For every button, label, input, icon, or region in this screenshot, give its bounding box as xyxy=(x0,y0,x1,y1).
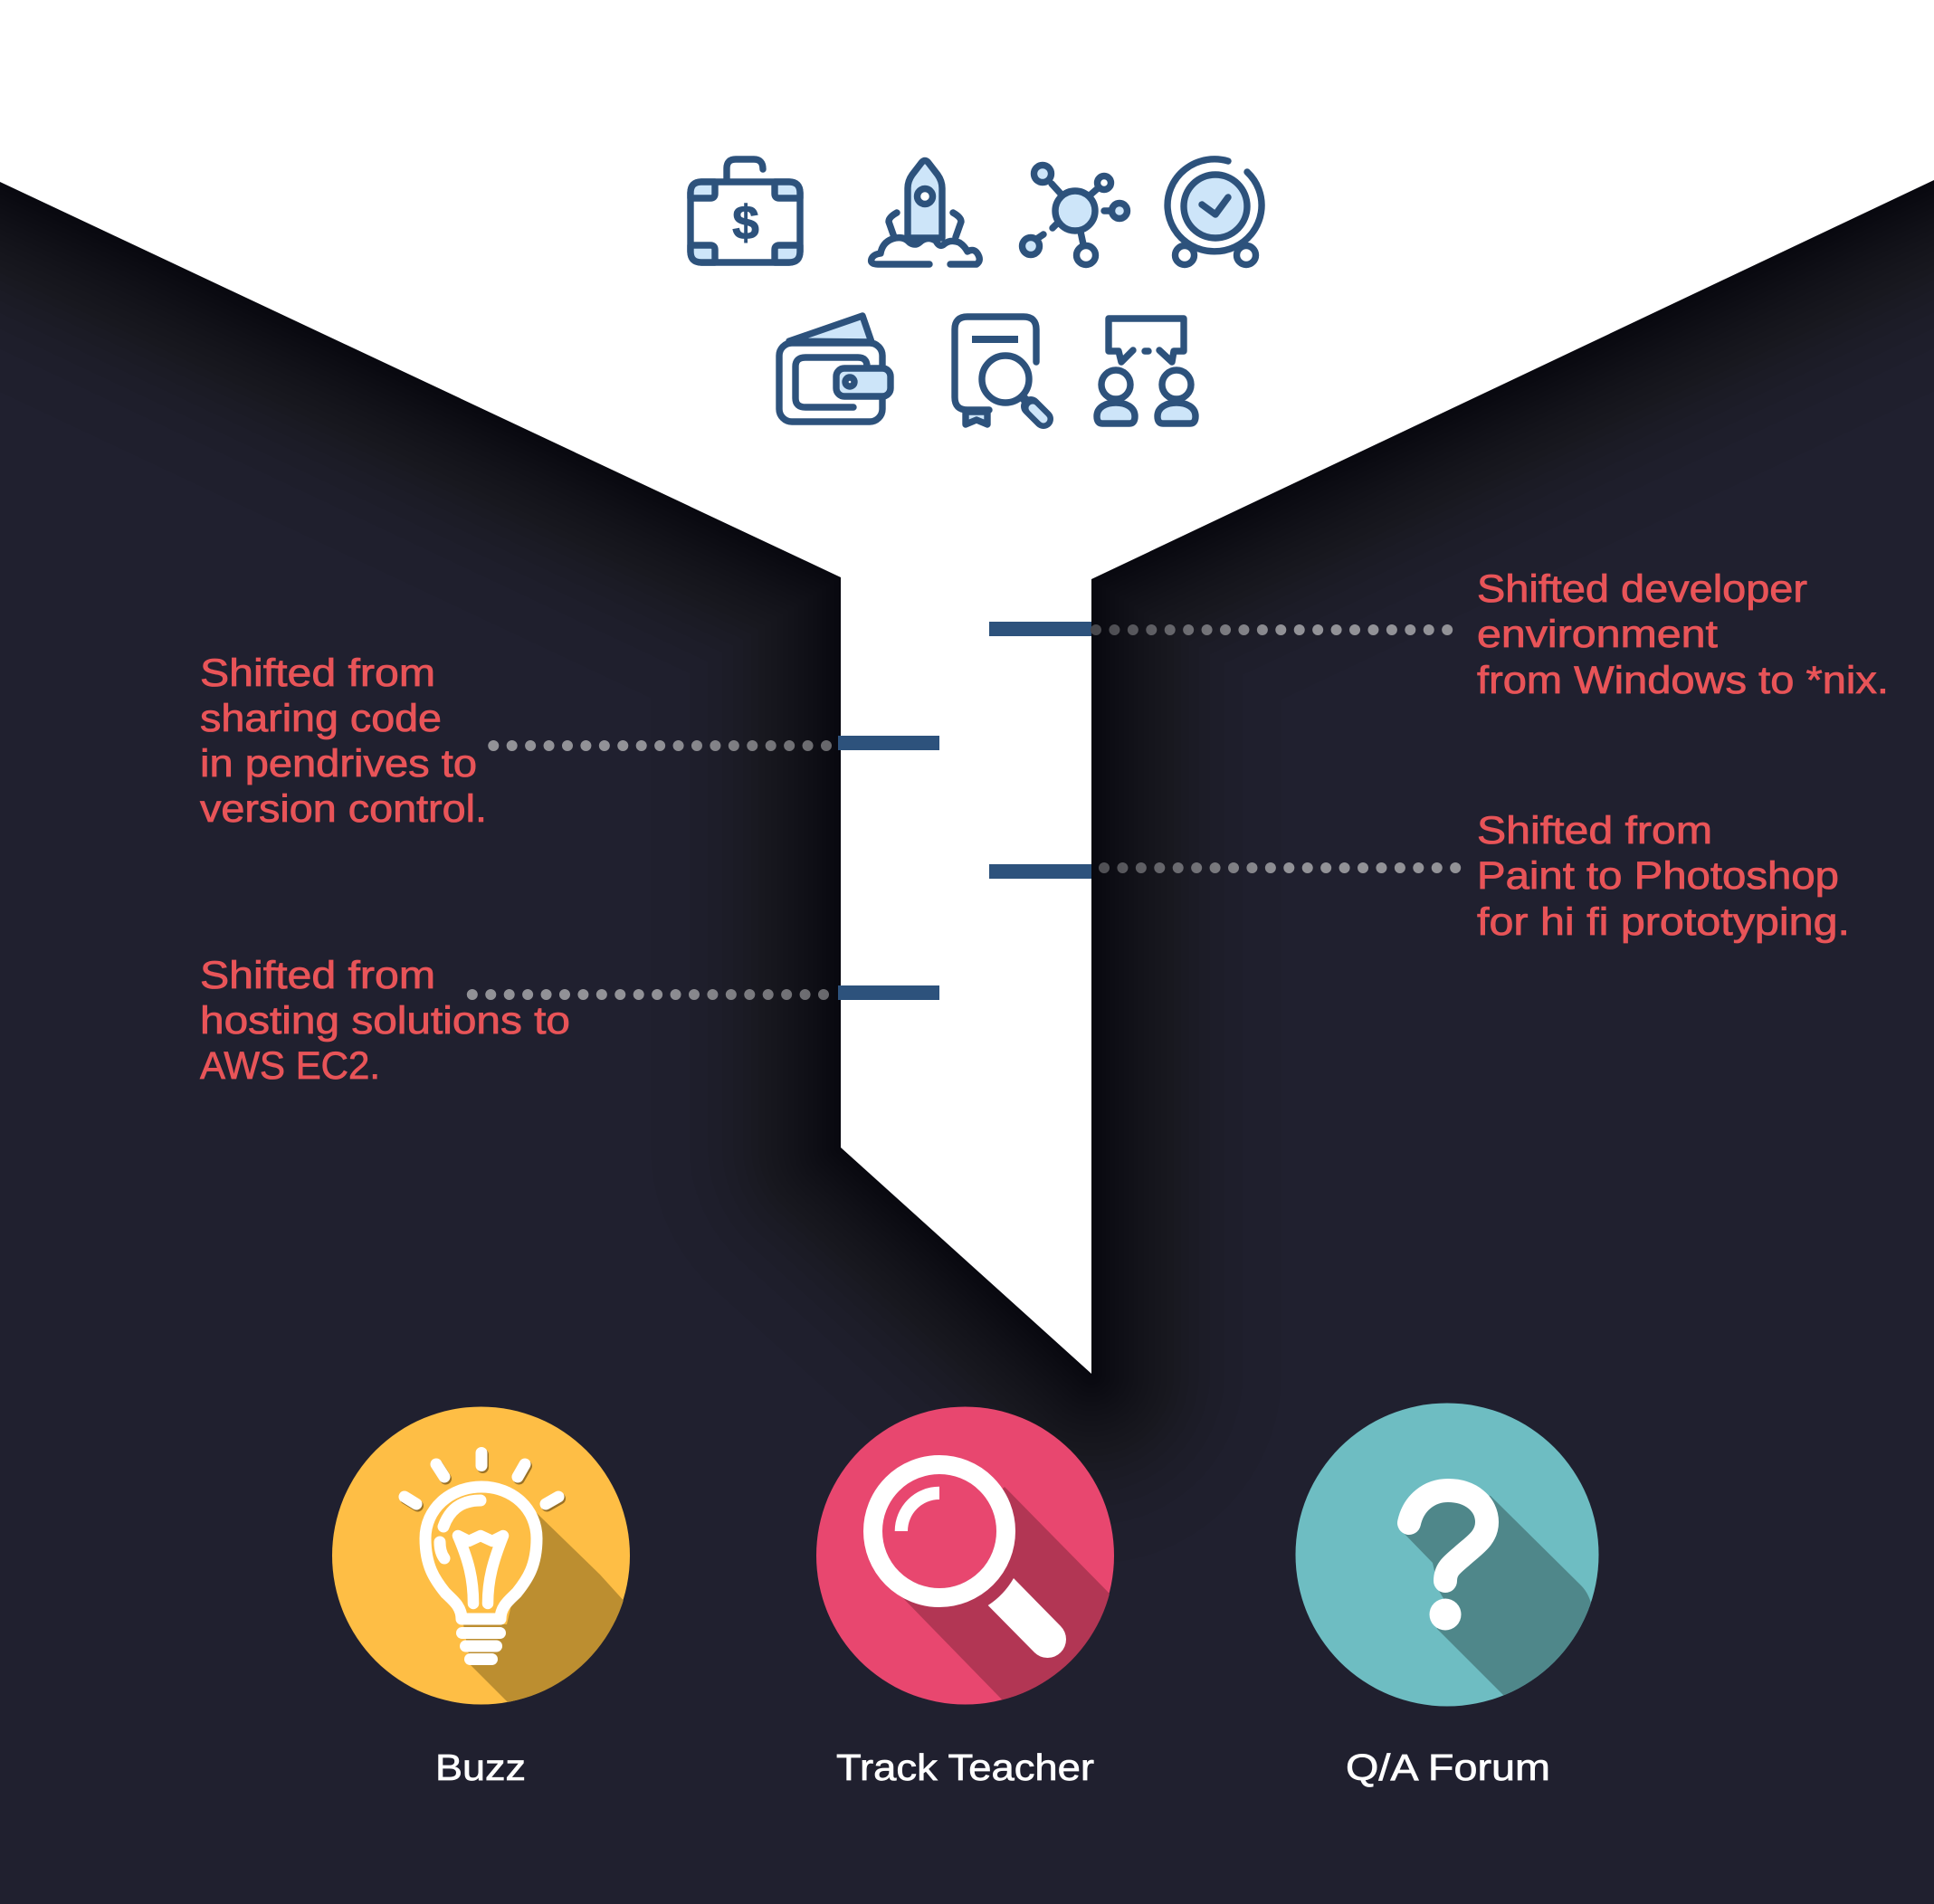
text block: hosting shift: Shifted from xyxy=(200,954,435,997)
label: Track Teacher: Track Teacher xyxy=(836,1747,1094,1788)
dotted connector: photoshop xyxy=(1104,862,1456,873)
text block: hosting shift xyxy=(200,954,570,1088)
text block: prototyping shift: for hi fi prototyping. xyxy=(1477,900,1850,944)
panel: white funnel shape xyxy=(0,0,1934,1374)
text block: developer environment shift: Shifted developer xyxy=(1477,567,1807,611)
timeline marker: top right xyxy=(989,622,1091,636)
text block: developer environment shift: from Windows to *nix. xyxy=(1477,659,1889,702)
icon: alarm clock with check xyxy=(1167,159,1262,264)
icon: track teacher magnifier badge xyxy=(816,1406,1114,1705)
timeline marker: lower left xyxy=(838,985,939,1000)
text block: version control shift: Shifted from xyxy=(200,652,435,695)
text block: prototyping shift: Shifted from xyxy=(1477,809,1712,852)
icon: document with magnifier xyxy=(955,317,1043,424)
icon: Q/A forum question mark badge xyxy=(1296,1403,1598,1707)
soft shadow around funnel xyxy=(0,0,1934,1374)
text block: prototyping shift xyxy=(1477,809,1850,944)
text block: version control shift: in pendrives to xyxy=(200,742,477,785)
icon: buzz light bulb badge xyxy=(332,1406,630,1705)
dotted connector: developer environment xyxy=(1096,624,1448,635)
label: Buzz: Buzz xyxy=(435,1747,526,1788)
icon: network hub xyxy=(1023,165,1128,264)
icon: briefcase with dollar xyxy=(691,159,800,262)
icon: rocket launching xyxy=(872,161,979,264)
text block: hosting shift: hosting solutions to xyxy=(200,999,570,1042)
label: Q/A Forum: Q/A Forum xyxy=(1346,1747,1550,1788)
icon: wallet xyxy=(779,316,891,422)
text block: version control shift xyxy=(200,652,487,831)
timeline marker: lower right xyxy=(989,864,1091,879)
text block: version control shift: sharing code xyxy=(200,697,442,740)
icon: briefcase with dollar: $ xyxy=(732,196,759,250)
text block: prototyping shift: Paint to Photoshop xyxy=(1477,854,1839,898)
dotted connector: version control xyxy=(493,740,826,751)
dotted connector: hosting xyxy=(472,989,824,1000)
text block: developer environment shift: environment xyxy=(1477,613,1718,656)
text block: hosting shift: AWS EC2. xyxy=(200,1044,380,1088)
text block: developer environment shift xyxy=(1477,567,1889,702)
icon: two people talking xyxy=(1097,319,1196,424)
timeline marker: upper left xyxy=(838,736,939,750)
text block: version control shift: version control. xyxy=(200,787,487,831)
